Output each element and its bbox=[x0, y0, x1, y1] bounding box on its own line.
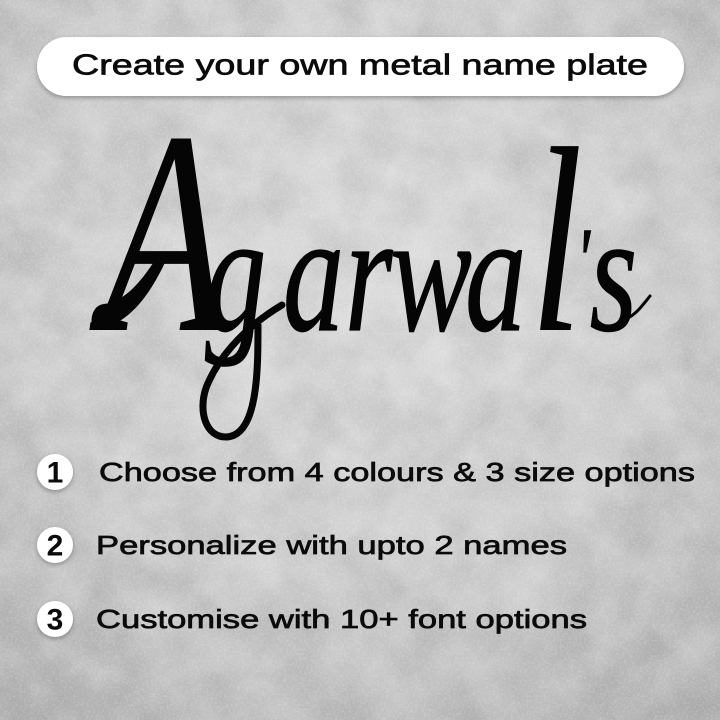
title: Create your own metal name plate bbox=[72, 50, 648, 82]
wordmark text: Agarwal's: a bbox=[283, 180, 344, 368]
wordmark text: Agarwal's: l bbox=[530, 94, 583, 387]
wordmark text: Agarwal's: ' bbox=[576, 210, 591, 310]
step 1 text: Choose from 4 colours & 3 size options bbox=[99, 457, 695, 487]
decorative swash: terminal flick bbox=[628, 296, 650, 318]
wordmark text: Agarwal's: A bbox=[89, 72, 230, 393]
wordmark text: Agarwal's: s bbox=[590, 180, 637, 368]
decorative swash: A tail bbox=[92, 252, 168, 330]
number badge 3 bbox=[37, 601, 73, 637]
step 2 text: Personalize with upto 2 names bbox=[96, 530, 567, 560]
step 3 bbox=[37, 601, 587, 637]
step 1 bbox=[37, 454, 695, 490]
wordmark text: Agarwal's: r bbox=[345, 180, 394, 368]
number badge 2: 2 bbox=[47, 530, 63, 562]
step 2 bbox=[37, 527, 567, 563]
wordmark text: Agarwal's: a bbox=[465, 180, 526, 368]
wordmark text: Agarwal's: g bbox=[205, 180, 266, 368]
number badge 1 bbox=[37, 454, 73, 490]
decorative swash: descender loop bbox=[203, 305, 282, 437]
number badge 3: 3 bbox=[47, 604, 63, 636]
number badge 1: 1 bbox=[47, 456, 63, 490]
step 3 text: Customise with 10+ font options bbox=[96, 604, 587, 634]
name plate wordmark bbox=[89, 72, 650, 437]
title pill bbox=[37, 37, 684, 96]
wordmark text: Agarwal's: w bbox=[390, 180, 472, 368]
number badge 2 bbox=[37, 527, 73, 563]
